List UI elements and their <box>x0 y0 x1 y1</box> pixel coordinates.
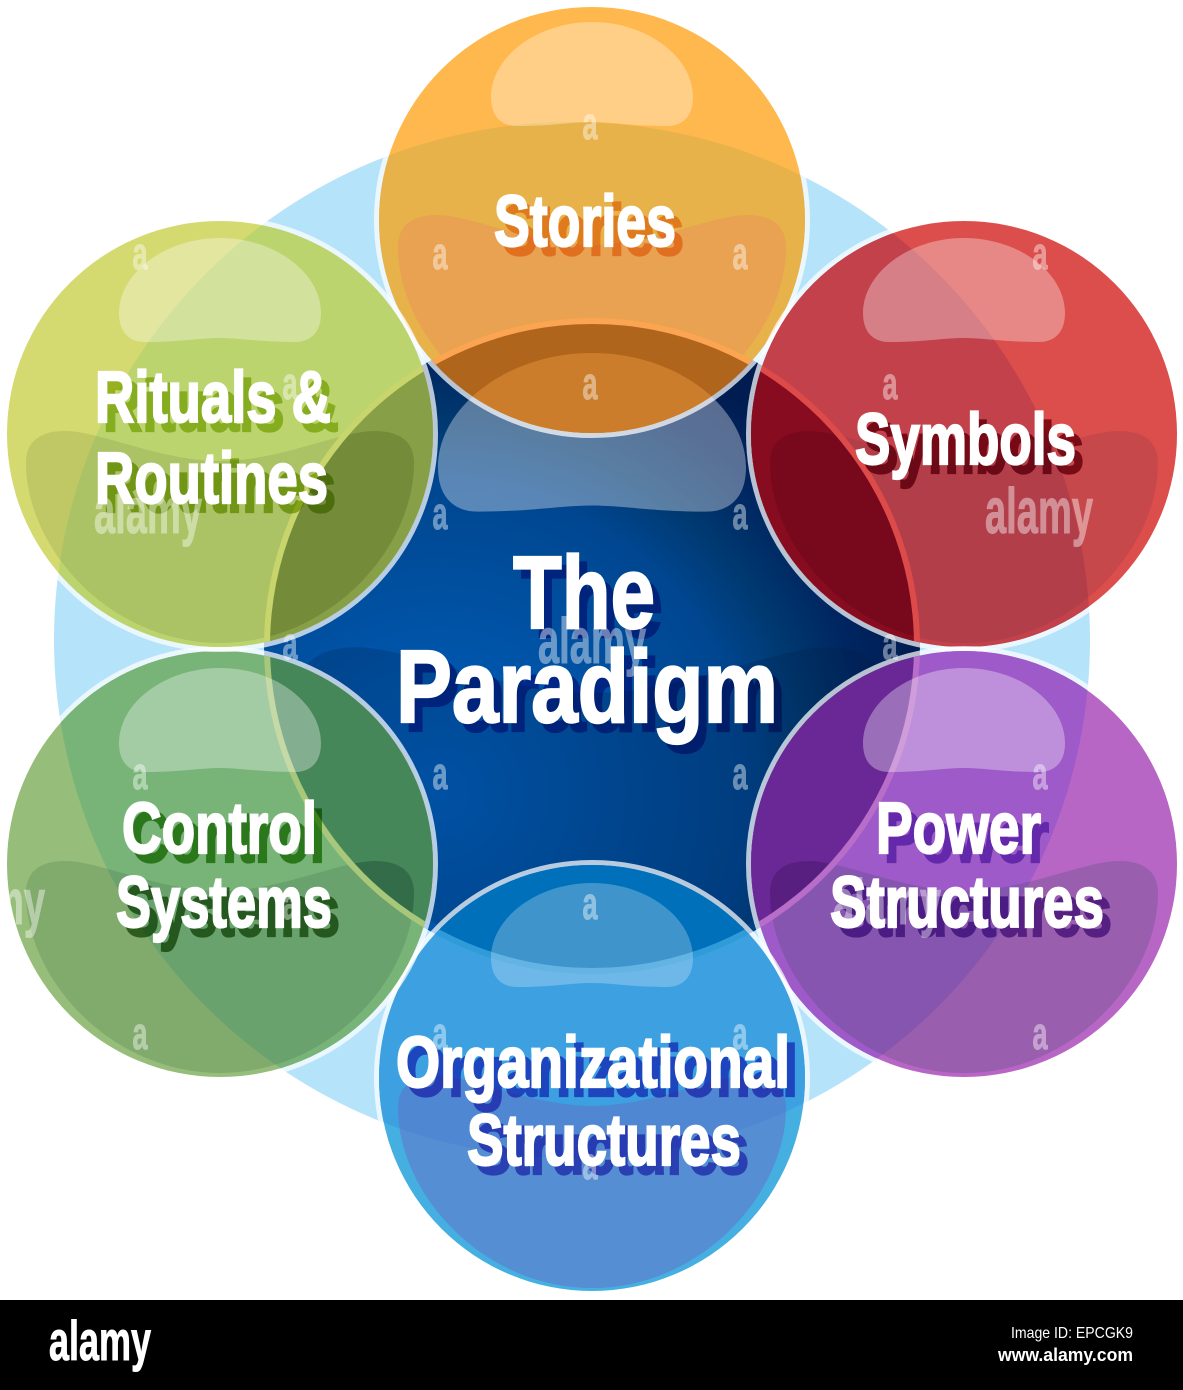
label: power structures <box>830 789 1112 952</box>
label: stories: Stories <box>502 191 684 271</box>
label: stories: Stories <box>494 182 676 262</box>
footer bar <box>0 1300 1183 1390</box>
label: organizational structures: Structures <box>475 1110 749 1190</box>
label: symbols: Symbols <box>863 409 1084 489</box>
watermark letters: a <box>282 878 298 929</box>
watermark letters: a <box>1032 748 1048 799</box>
circle: rituals and routines <box>7 221 438 652</box>
watermark letters: a <box>132 1008 148 1059</box>
label: rituals and routines: Routines <box>95 439 328 519</box>
watermark words: alamy <box>94 475 202 547</box>
footer url: www.alamy.com <box>997 1345 1133 1365</box>
label: control systems: Control <box>122 789 317 869</box>
footer image id: Image ID: EPCGK9 <box>1011 1325 1133 1342</box>
central circle <box>264 318 920 974</box>
watermark letters: a <box>582 358 598 409</box>
watermark letters: a <box>132 748 148 799</box>
watermark words <box>0 475 1093 938</box>
watermark letters: a <box>282 358 298 409</box>
watermark letters: a <box>732 1008 748 1059</box>
label: rituals and routines: Rituals & <box>95 358 331 438</box>
watermark letters <box>132 98 1048 1189</box>
label: symbols: Symbols <box>855 400 1076 480</box>
watermark letters: a <box>882 618 898 669</box>
background light blue circle <box>54 122 1090 1158</box>
watermark letters: a <box>582 878 598 929</box>
label: power structures: Power <box>884 798 1049 878</box>
label: rituals and routines: Routines <box>103 448 336 528</box>
label: the paradigm: Paradigm <box>404 638 786 753</box>
watermark letters: a <box>1032 228 1048 279</box>
watermark words: alamy <box>833 866 941 938</box>
label: control systems: Systems <box>116 863 332 943</box>
label: rituals and routines: Rituals & <box>103 367 339 447</box>
label: the paradigm <box>396 535 786 753</box>
label: the paradigm: Paradigm <box>396 629 778 744</box>
watermark letters: a <box>732 748 748 799</box>
label: power structures: Power <box>876 789 1041 869</box>
watermark words: alamy <box>538 605 646 677</box>
label: organizational structures: Organizational <box>396 1023 790 1103</box>
label: organizational structures: Organizational <box>404 1032 798 1112</box>
label: control systems <box>116 789 340 952</box>
circle: control systems <box>7 646 438 1077</box>
circle: power structures <box>746 646 1177 1077</box>
watermark letters: a <box>882 358 898 409</box>
circle: organizational structures <box>374 860 810 1291</box>
watermark letters: a <box>582 98 598 149</box>
watermark letters: a <box>582 1138 598 1189</box>
watermark letters: a <box>432 488 448 539</box>
circle: stories <box>374 7 810 438</box>
central upper highlight <box>438 353 746 512</box>
watermark letters: a <box>432 1008 448 1059</box>
circle: symbols <box>746 221 1177 652</box>
central lower highlight <box>297 647 887 970</box>
label: power structures: Structures <box>830 863 1104 943</box>
watermark letters: a <box>282 618 298 669</box>
watermark letters: a <box>432 228 448 279</box>
watermark letters: a <box>1032 1008 1048 1059</box>
watermark letters: a <box>432 748 448 799</box>
label: rituals and routines <box>95 358 339 528</box>
watermark letters: a <box>132 228 148 279</box>
footer logo: alamy <box>49 1309 151 1372</box>
label: control systems: Control <box>130 798 325 878</box>
label: the paradigm: The <box>513 535 655 650</box>
watermark words: alamy <box>985 475 1093 547</box>
label: the paradigm: The <box>521 544 663 659</box>
label: organizational structures: Structures <box>467 1101 741 1181</box>
label: control systems: Systems <box>124 872 340 952</box>
watermark letters: a <box>732 488 748 539</box>
label: organizational structures <box>396 1023 798 1190</box>
watermark letters: a <box>732 228 748 279</box>
